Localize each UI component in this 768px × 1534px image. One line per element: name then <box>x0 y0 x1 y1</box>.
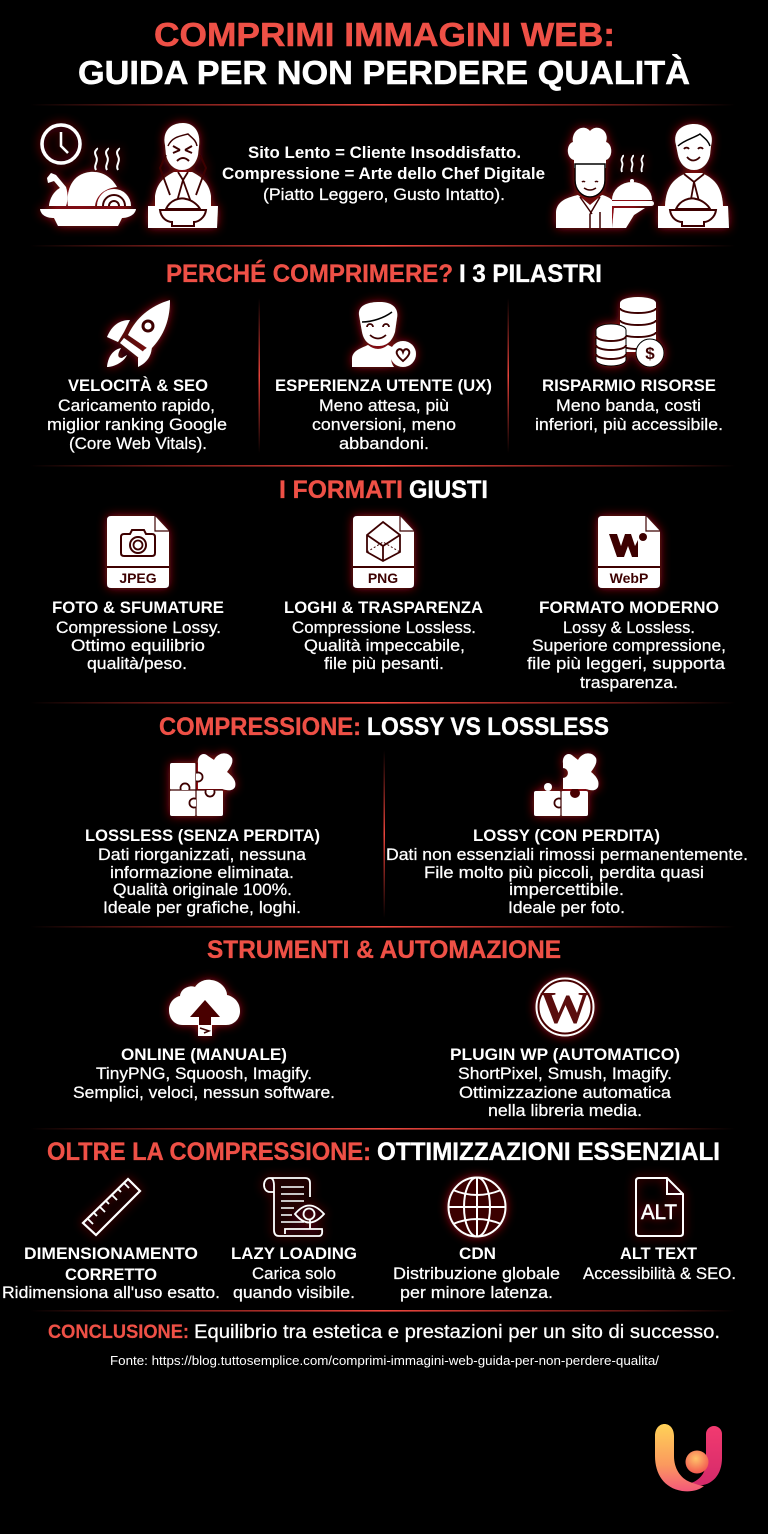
panel: online manuale: ONLINE (MANUALE) <box>121 1045 287 1064</box>
icon: scroll with eye <box>264 1178 324 1236</box>
panel: lossy: impercettibile. <box>509 880 624 899</box>
heading: lossy vs lossless <box>159 713 609 741</box>
heading: lossy vs lossless: COMPRESSIONE: <box>159 713 361 741</box>
panel: PNG: LOGHI & TRASPARENZA <box>284 598 483 617</box>
icon: WordPress <box>536 978 594 1036</box>
icon: rocket <box>107 300 170 367</box>
icon: JPEG file <box>107 516 169 588</box>
heading: i formati giusti <box>279 476 488 504</box>
panel: lossy: Dati non essenziali rimossi permanentemente. <box>386 845 748 864</box>
panel: esperienza utente <box>275 302 492 453</box>
icon: PNG file <box>353 516 414 588</box>
panel: WebP: Superiore compressione, <box>532 636 726 655</box>
panel: esperienza utente: conversioni, meno <box>312 415 456 434</box>
panel: lazy loading <box>231 1178 357 1302</box>
panel: WebP <box>527 516 726 692</box>
source: Fonte: https://blog.tuttosemplice.com/comprimi-immagini-web-guida-per-non-perdere-qualita/ <box>110 1353 659 1368</box>
panel: plugin wp: nella libreria media. <box>488 1101 642 1120</box>
panel: JPEG <box>52 516 224 673</box>
title: GUIDA PER NON PERDERE QUALITÀ <box>78 54 690 91</box>
panel: CDN: CDN <box>459 1244 496 1263</box>
panel: JPEG: Ottimo equilibrio <box>71 636 205 655</box>
panel: PNG: Compressione Lossless. <box>292 618 476 637</box>
panel: PNG <box>284 516 483 673</box>
conclusion: CONCLUSIONE: <box>48 1322 189 1343</box>
panel: lazy loading: Carica solo <box>252 1264 336 1283</box>
panel: WebP: FORMATO MODERNO <box>539 598 719 617</box>
icon: cloud upload <box>169 980 240 1036</box>
title: COMPRIMI IMMAGINI WEB: <box>154 16 615 53</box>
heading: oltre la compressione: OTTIMIZZAZIONI ESSENZIALI <box>377 1138 720 1166</box>
panel: velocità e SEO <box>47 300 227 453</box>
icon: ALT file <box>636 1178 683 1236</box>
panel: alt text <box>583 1178 736 1283</box>
icon: WordPress: W <box>540 982 590 1033</box>
icon: WebP file <box>598 516 660 588</box>
icon: ruler <box>83 1179 140 1235</box>
conclusion: Equilibrio tra estetica e prestazioni per un sito di successo. <box>194 1322 720 1343</box>
panel: CDN <box>393 1178 560 1302</box>
panel: risparmio risorse: RISPARMIO RISORSE <box>542 376 716 395</box>
intro text <box>222 143 545 204</box>
panel: velocità e SEO: (Core Web Vitals). <box>69 434 207 453</box>
panel: intro <box>40 123 729 228</box>
icon: chef with cloche <box>556 128 654 228</box>
icon: coins <box>596 297 664 367</box>
heading: oltre la compressione <box>47 1138 720 1166</box>
panel: WebP: trasparenza. <box>580 673 678 692</box>
panel: lossy: LOSSY (CON PERDITA) <box>473 826 660 845</box>
heading: i formati giusti: I FORMATI <box>279 476 403 504</box>
panel: plugin wp: ShortPixel, Smush, Imagify. <box>458 1064 672 1083</box>
heading: lossy vs lossless: LOSSY VS LOSSLESS <box>367 713 609 741</box>
icon: globe <box>448 1178 506 1236</box>
icon: clock and food plate <box>40 125 136 226</box>
heading: strumenti e automazione: STRUMENTI & AUTOMAZIONE <box>207 936 561 964</box>
panel: risparmio risorse: Meno banda, costi <box>556 396 701 415</box>
panel: online manuale: TinyPNG, Squoosh, Imagify. <box>96 1064 312 1083</box>
heading: perché comprimere: PERCHÉ COMPRIMERE? <box>166 259 453 288</box>
title <box>78 16 690 91</box>
icon: PNG file: PNG <box>368 570 398 586</box>
panel: JPEG: Compressione Lossy. <box>56 618 221 637</box>
panel: lossy: Ideale per foto. <box>508 898 625 917</box>
panel: lazy loading: LAZY LOADING <box>231 1244 357 1263</box>
icon: happy customer <box>658 124 729 228</box>
logo <box>655 1424 722 1491</box>
panel: dimensionamento <box>2 1179 220 1302</box>
panel: lossless: Dati riorganizzati, nessuna <box>98 845 307 864</box>
panel: lossless <box>85 753 320 917</box>
icon: ALT file: ALT <box>641 1201 677 1224</box>
icon: WebP file: WebP <box>610 570 648 586</box>
panel: velocità e SEO: Caricamento rapido, <box>58 396 215 415</box>
panel: JPEG: qualità/peso. <box>87 654 187 673</box>
icon: complete puzzle <box>170 753 235 816</box>
intro text: (Piatto Leggero, Gusto Intatto). <box>263 185 505 204</box>
heading: perché comprimere <box>166 259 602 288</box>
panel: esperienza utente: ESPERIENZA UTENTE (UX) <box>275 376 492 395</box>
panel: velocità e SEO: VELOCITÀ & SEO <box>68 376 208 395</box>
icon: puzzle with detached piece <box>534 753 599 816</box>
panel: lossless: Ideale per grafiche, loghi. <box>103 898 301 917</box>
panel: alt text: ALT TEXT <box>620 1244 698 1263</box>
panel: velocità e SEO: miglior ranking Google <box>47 415 227 434</box>
panel: plugin wp <box>450 978 680 1120</box>
icon: coins: $ <box>645 344 655 363</box>
panel: lossless: informazione eliminata. <box>110 863 294 882</box>
heading: perché comprimere: I 3 PILASTRI <box>459 260 602 288</box>
panel: risparmio risorse <box>535 297 723 434</box>
panel: dimensionamento: Ridimensiona all'uso esatto. <box>2 1283 220 1302</box>
panel: PNG: Qualità impeccabile, <box>304 636 465 655</box>
panel: WebP: Lossy & Lossless. <box>563 618 695 637</box>
panel: alt text: Accessibilità & SEO. <box>583 1264 736 1283</box>
panel: dimensionamento: DIMENSIONAMENTO <box>24 1244 198 1263</box>
intro text: Sito Lento = Cliente Insoddisfatto. <box>248 143 521 162</box>
panel: esperienza utente: abbandoni. <box>339 434 429 453</box>
panel: online manuale: Semplici, veloci, nessun software. <box>73 1083 335 1102</box>
panel: lazy loading: quando visibile. <box>233 1283 355 1302</box>
panel: online manuale <box>73 980 335 1102</box>
panel: JPEG: FOTO & SFUMATURE <box>52 598 224 617</box>
icon: user with heart <box>352 302 416 367</box>
panel: plugin wp: PLUGIN WP (AUTOMATICO) <box>450 1045 680 1064</box>
heading: i formati giusti: GIUSTI <box>409 476 488 504</box>
panel: esperienza utente: Meno attesa, più <box>319 396 449 415</box>
panel: PNG: file più pesanti. <box>324 654 444 673</box>
panel: risparmio risorse: inferiori, più accessibile. <box>535 415 723 434</box>
panel: CDN: Distribuzione globale <box>393 1264 560 1283</box>
panel: lossless: Qualità originale 100%. <box>113 880 292 899</box>
icon: angry customer <box>148 123 218 228</box>
intro text: Compressione = Arte dello Chef Digitale <box>222 164 545 183</box>
panel: lossy: File molto più piccoli, perdita quasi <box>424 863 704 882</box>
panel: plugin wp: Ottimizzazione automatica <box>459 1083 672 1102</box>
panel: dimensionamento: CORRETTO <box>65 1265 157 1284</box>
icon: JPEG file: JPEG <box>119 570 157 586</box>
panel: CDN: per minore latenza. <box>400 1283 553 1302</box>
panel: WebP: file più leggeri, supporta <box>527 654 726 673</box>
panel: lossless: LOSSLESS (SENZA PERDITA) <box>85 826 320 845</box>
panel: lossy <box>386 753 748 917</box>
heading: oltre la compressione: OLTRE LA COMPRESSIONE: <box>47 1138 371 1166</box>
